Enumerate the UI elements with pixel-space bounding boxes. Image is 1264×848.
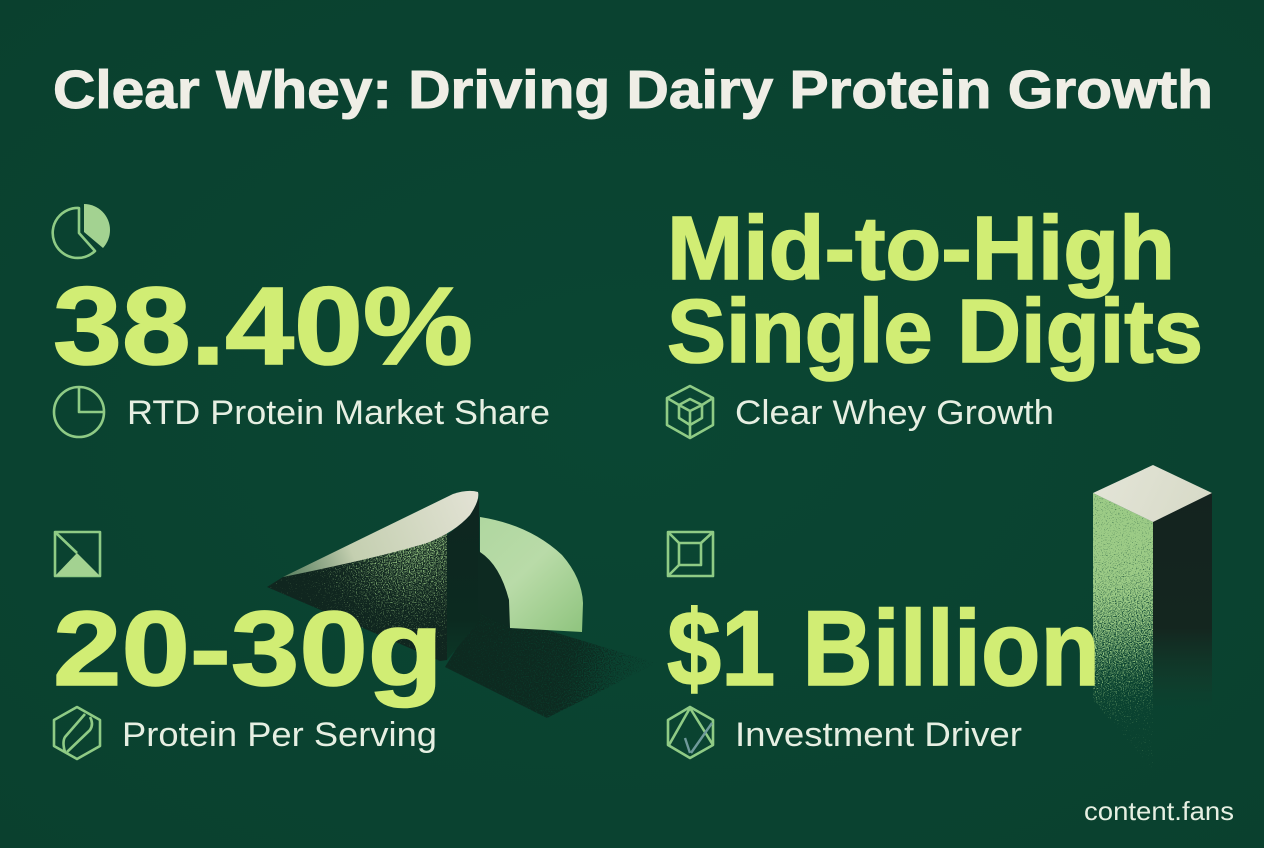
- stat: $1 Billion: $1 Billion: [667, 588, 1100, 708]
- stat: mid-to-high single digits: [667, 199, 1203, 382]
- title: Clear Whey: Driving Dairy Protein Growth: [53, 60, 1213, 120]
- label: market share: RTD Protein Market Share: [127, 394, 550, 432]
- icon: pie outline: [54, 387, 104, 437]
- panel: market share: [53, 204, 550, 437]
- label: protein: Protein Per Serving: [122, 716, 437, 754]
- stat: 20-30g: 20-30g: [53, 590, 443, 708]
- panel: growth: [667, 199, 1203, 438]
- panel: protein per serving: [53, 532, 443, 759]
- panel: investment: [667, 532, 1100, 758]
- icon: pie chart with wedge: [53, 204, 110, 258]
- 3D illustration: isometric bar: [1093, 465, 1212, 770]
- icon: cube in hexagon: [667, 386, 713, 438]
- label: growth: Clear Whey Growth: [735, 394, 1054, 432]
- stat: mid-to-high single digits: Single Digits: [667, 282, 1203, 382]
- stat: 38.40%: 38.40%: [53, 265, 473, 388]
- source credit: content.fans: [1084, 796, 1234, 826]
- icon: hexagon with bands: [54, 707, 100, 759]
- icon: hexagon with facets: [668, 707, 713, 758]
- 3D illustration: curved wedge and arch: [265, 491, 660, 720]
- stat: mid-to-high single digits: Mid-to-High: [667, 199, 1175, 299]
- icon: square with triangle: [55, 532, 100, 576]
- icon: nested square: [668, 532, 713, 576]
- label: investment: Investment Driver: [735, 716, 1022, 754]
